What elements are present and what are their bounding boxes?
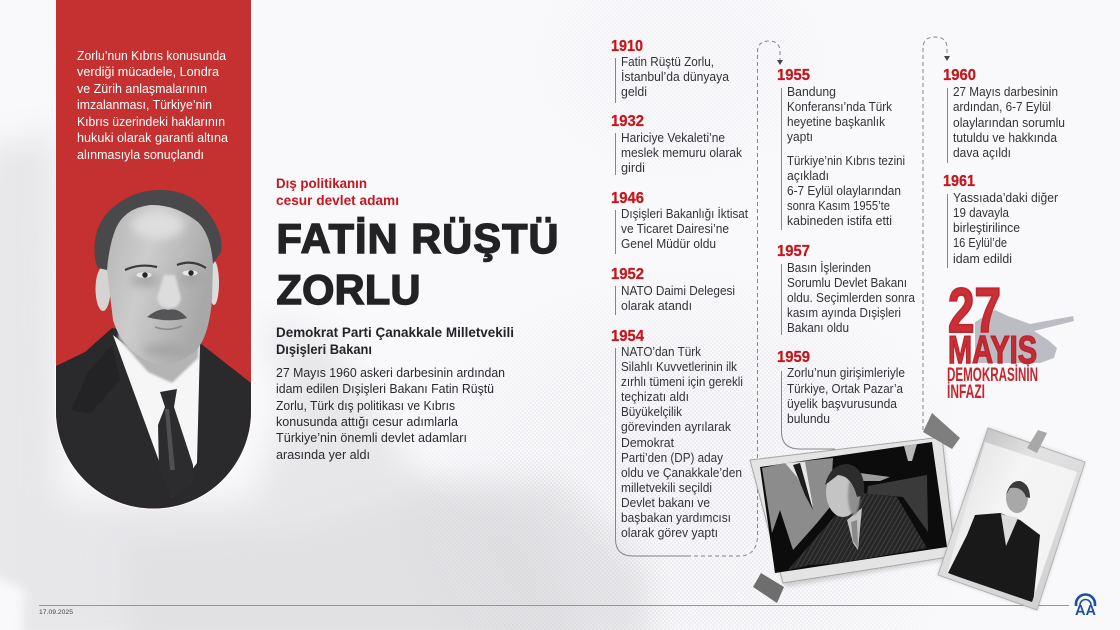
entry 1959 xyxy=(777,349,905,426)
entry 1960 xyxy=(943,67,1065,160)
entry 1946 xyxy=(611,190,748,251)
entry 1955: kabineden istifa etti xyxy=(787,213,892,228)
entry 1961: Yassıada’daki diğer xyxy=(953,190,1059,205)
entry 1957: kasım ayında Dışişleri xyxy=(787,305,901,320)
entry 1959: bulundu xyxy=(787,411,830,426)
intro text on red panel: alınmasıyla sonuçlandı xyxy=(77,147,204,162)
entry 1961: 19 davayla xyxy=(953,205,1010,220)
27 Mayıs emblem with tank: MAYIS xyxy=(948,329,1037,372)
entry 1946: ve Ticaret Dairesi’ne xyxy=(621,221,729,236)
role heading: Demokrat Parti Çanakkale Milletvekili xyxy=(276,325,514,340)
mustache xyxy=(147,309,187,320)
head xyxy=(826,475,860,517)
intro text on red panel: ve Zürih anlaşmalarının xyxy=(77,81,207,96)
entry 1960: tutuldu ve hakkında xyxy=(953,130,1058,145)
timeline column 3 xyxy=(943,67,1065,266)
standing man in grey suit xyxy=(762,458,833,550)
entry 1955: heyetine başkanlık xyxy=(787,114,885,129)
entry 1954: oldu ve Çanakkale’den xyxy=(621,465,742,480)
photo: Zorlu standing xyxy=(938,428,1085,610)
entry 1946: Dışişleri Bakanlığı İktisat xyxy=(621,206,748,221)
portrait of Fatin Rüştü Zorlu xyxy=(56,190,251,520)
27 Mayıs emblem with tank: 27 xyxy=(948,276,1001,346)
biography text: idam edilen Dışişleri Bakanı Fatin Rüştü xyxy=(276,381,494,396)
entry 1961: birleştirilince xyxy=(953,220,1020,235)
biography text: 27 Mayıs 1960 askeri darbesinin ardından xyxy=(276,365,505,380)
entry 1932: girdi xyxy=(621,160,645,175)
panel: red portrait column xyxy=(55,0,252,520)
ears xyxy=(96,267,110,311)
entry 1910 xyxy=(611,38,730,99)
entry 1946: Genel Müdür oldu xyxy=(621,236,716,251)
shirt xyxy=(113,335,200,497)
entry 1954: NATO’dan Türk xyxy=(621,344,701,359)
timeline column 1 xyxy=(611,38,748,540)
timeline connector lines and arrows xyxy=(616,37,950,556)
entry 1954: zırhlı tümeni için gerekli xyxy=(621,374,743,389)
entry 1957: Bakanı oldu xyxy=(787,320,849,335)
eyebrows xyxy=(125,266,157,270)
entry 1954: olarak görev yaptı xyxy=(621,525,718,540)
biography text: arasında yer aldı xyxy=(276,447,370,462)
entry 1961 xyxy=(943,173,1059,266)
entry 1952: olarak atandı xyxy=(621,298,692,313)
entry 1955: 1955 xyxy=(777,67,810,84)
subtitle: Dış politikanın xyxy=(276,176,367,191)
intro text on red panel: Kıbrıs üzerindeki haklarının xyxy=(77,114,225,129)
entry 1959: üyelik başvurusunda xyxy=(787,396,898,411)
entry 1954: Silahlı Kuvvetlerinin ilk xyxy=(621,359,737,374)
neck shadow xyxy=(116,332,200,384)
shirt and tie xyxy=(847,508,862,550)
suit on the wall xyxy=(904,444,917,461)
entry 1954: Parti’den (DP) aday xyxy=(621,450,723,465)
intro text on red panel: imzalanması, Türkiye’nin xyxy=(77,97,212,112)
27 Mayıs emblem with tank: DEMOKRASİNİN xyxy=(947,363,1038,386)
entry 1955: Konferansı’nda Türk xyxy=(787,99,892,114)
entry 1957 xyxy=(777,243,916,335)
intro text on red panel: Zorlu’nun Kıbrıs konusunda xyxy=(77,48,227,63)
footer line xyxy=(39,605,1069,606)
icon: tank silhouette xyxy=(975,310,1074,363)
entry 1910: İstanbul’da dünyaya xyxy=(621,69,730,84)
title xyxy=(276,215,558,313)
entry 1954: başbakan yardımcısı xyxy=(621,510,731,525)
intro text on red panel: verdiği mücadele, Londra xyxy=(77,64,220,79)
biography text: Türkiye’nin önemli devlet adamları xyxy=(276,430,467,445)
biography text: konusunda attığı cesur adımlarla xyxy=(276,414,459,429)
title: FATİN RÜŞTÜ xyxy=(276,215,558,262)
hair xyxy=(94,190,222,270)
photo: Zorlu signing at desk xyxy=(750,437,957,587)
entry 1954: görevinden ayrılarak xyxy=(621,419,731,434)
entry 1959: Türkiye, Ortak Pazar’a xyxy=(787,381,904,396)
entry 1957: oldu. Seçimlerden sonra xyxy=(787,290,916,305)
entry 1960: ardından, 6-7 Eylül xyxy=(953,99,1051,114)
entry 1932: 1932 xyxy=(611,113,644,130)
mouth shadow xyxy=(155,326,182,329)
entry 1955: 6-7 Eylül olaylarından xyxy=(787,183,901,198)
subtitle: cesur devlet adamı xyxy=(276,193,399,208)
dark double-breasted suit xyxy=(948,513,1040,605)
entry 1955: Bandung xyxy=(787,84,836,99)
entry 1954 xyxy=(611,328,743,540)
entry 1957: Basın İşlerinden xyxy=(787,260,871,275)
entry 1955: sonra Kasım 1955’te xyxy=(787,198,890,213)
intro text on red panel: hukuki olarak garanti altına xyxy=(77,130,229,145)
entry 1960: olaylarından sorumlu xyxy=(953,115,1065,130)
nose xyxy=(157,275,181,308)
entry 1932: Hariciye Vekaleti’ne xyxy=(621,130,725,145)
timeline column 2 xyxy=(777,67,916,426)
entry 1961: 1961 xyxy=(943,173,975,190)
entry 1959: Zorlu’nun girişimleriyle xyxy=(787,365,905,380)
entry 1954: 1954 xyxy=(611,328,644,345)
entry 1955: Türkiye’nin Kıbrıs tezini xyxy=(787,153,905,168)
entry 1952: 1952 xyxy=(611,266,644,283)
subtitle xyxy=(276,176,399,208)
entry 1954: teçhizatı aldı xyxy=(621,389,689,404)
entry 1960: 1960 xyxy=(943,67,976,84)
entry 1946: 1946 xyxy=(611,190,644,207)
entry 1959: 1959 xyxy=(777,349,810,366)
entry 1961: idam edildi xyxy=(953,251,1012,266)
entry 1957: Sorumlu Devlet Bakanı xyxy=(787,275,907,290)
face xyxy=(106,198,213,364)
icon: AA logo xyxy=(1075,594,1096,619)
title: ZORLU xyxy=(276,266,420,313)
intro text on red panel xyxy=(77,48,229,162)
entry 1910: geldi xyxy=(621,84,647,99)
entry 1955 xyxy=(777,67,905,228)
entry 1952 xyxy=(611,266,735,313)
entry 1910: 1910 xyxy=(611,38,643,55)
27 Mayıs emblem with tank xyxy=(947,276,1074,403)
entry 1961: 16 Eylül’de xyxy=(953,235,1007,250)
entry 1960: 27 Mayıs darbesinin xyxy=(953,84,1058,99)
role heading xyxy=(276,325,514,357)
entry 1954: milletvekili seçildi xyxy=(621,480,712,495)
entry 1957: 1957 xyxy=(777,243,810,260)
tape pieces xyxy=(753,413,1047,603)
entry 1910: Fatin Rüştü Zorlu, xyxy=(621,54,714,69)
entry 1932 xyxy=(611,113,742,175)
biography text xyxy=(276,365,505,462)
27 Mayıs emblem with tank: İNFAZI xyxy=(947,380,985,403)
entry 1932: meslek memuru olarak xyxy=(621,145,742,160)
entry 1960: dava açıldı xyxy=(953,145,1011,160)
suit xyxy=(56,328,251,520)
entry 1954: Büyükelçilik xyxy=(621,404,682,419)
eyes xyxy=(136,272,152,278)
hand on chair xyxy=(860,473,890,481)
entry 1955: açıkladı xyxy=(787,168,829,183)
entry 1955: yaptı xyxy=(787,129,813,144)
face shading xyxy=(131,211,203,355)
entry 1954: Devlet bakanı ve xyxy=(621,495,710,510)
role heading: Dışişleri Bakanı xyxy=(276,342,372,357)
entry 1954: Demokrat xyxy=(621,435,674,450)
date: 17.09.2025 xyxy=(39,609,73,616)
icon: AA logo: AA xyxy=(1075,602,1096,619)
head xyxy=(1006,488,1028,513)
leather chair xyxy=(867,475,928,532)
seated man's pinstripe suit xyxy=(788,493,927,570)
entry 1952: NATO Daimi Delegesi xyxy=(621,283,735,298)
tie xyxy=(158,389,193,497)
biography text: Zorlu, Türk dış politikası ve Kıbrıs xyxy=(276,398,455,413)
